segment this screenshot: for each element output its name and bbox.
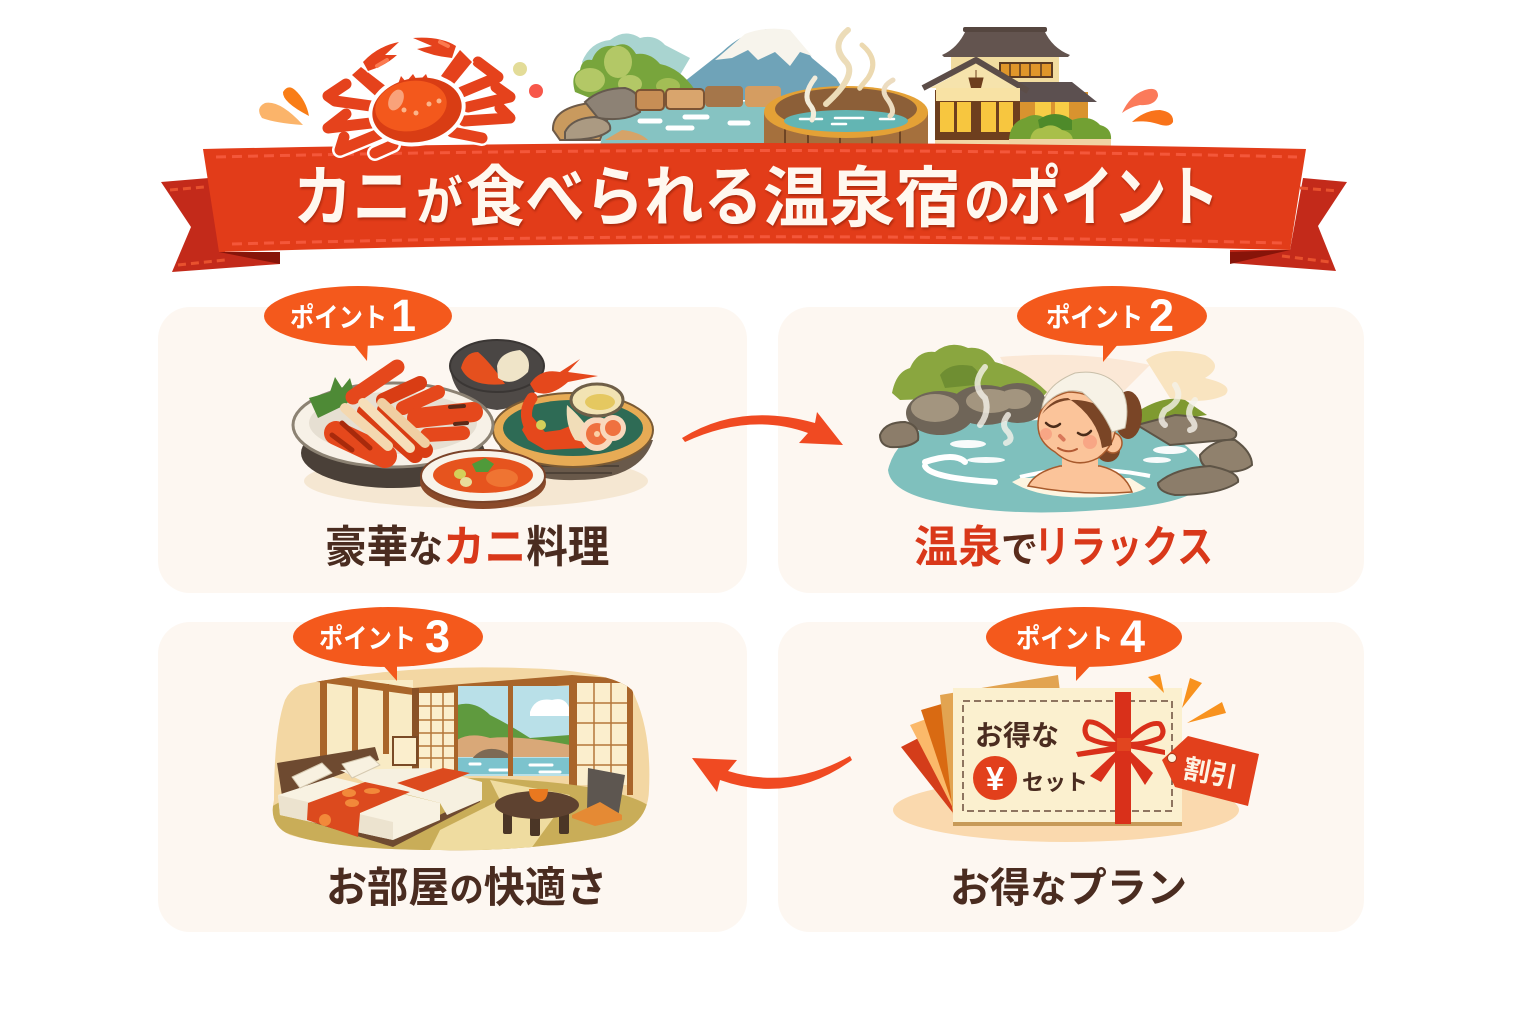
caption: point 2: で xyxy=(1001,529,1038,570)
title: カニ xyxy=(293,161,412,235)
caption: point 2: 温泉 xyxy=(914,523,1002,572)
caption: point 4: お得なプラン xyxy=(950,865,1187,911)
badge: point 1 xyxy=(264,286,452,361)
front plate xyxy=(420,450,546,509)
decoration: right splash xyxy=(1122,89,1173,126)
illustration: red crab xyxy=(328,38,510,154)
stone bowl xyxy=(450,340,544,410)
badge: point 4: ポイント xyxy=(1016,624,1113,654)
title: 温泉宿 xyxy=(763,161,961,235)
illustration: discount voucher xyxy=(893,674,1259,842)
badge: point 3 xyxy=(293,607,483,681)
yen circle xyxy=(973,756,1017,800)
title: が xyxy=(416,174,463,232)
title: の xyxy=(964,174,1011,232)
banner ribbon tails xyxy=(161,178,1347,272)
illustration: woman in hot spring xyxy=(880,345,1252,512)
panel: point 3 xyxy=(158,622,747,932)
title xyxy=(293,160,1219,235)
illustration: bushes by inn xyxy=(1009,114,1111,147)
badge: point 3: 3 xyxy=(425,611,450,662)
caption: point 3: お部屋の快適さ xyxy=(326,864,607,911)
arrow: point 4 to point 3 xyxy=(692,756,852,792)
caption: point 2: リラックス xyxy=(1034,523,1213,572)
banner xyxy=(203,143,1306,252)
voucher set text: セット xyxy=(1022,770,1088,795)
illustration: ryokan inn xyxy=(923,27,1097,148)
panel: point 1 xyxy=(158,307,747,593)
right bowl xyxy=(493,359,653,480)
arrow: point 1 to point 2 xyxy=(682,412,843,445)
illustration: mountain and outdoor bath xyxy=(553,29,850,145)
badge: point 2: 2 xyxy=(1149,290,1174,341)
illustration: Japanese room xyxy=(266,660,658,855)
yen circle: ¥ xyxy=(986,760,1005,797)
panel: point 2 xyxy=(778,307,1364,593)
ribbon bow xyxy=(1076,722,1165,785)
badge: point 2: ポイント xyxy=(1046,303,1143,333)
decoration: left splash xyxy=(259,87,309,125)
badge: point 4: 4 xyxy=(1120,611,1145,662)
tag text: 割引 xyxy=(1181,753,1240,793)
title: ポイント xyxy=(1008,160,1219,234)
illustration: crab feast xyxy=(293,340,653,509)
badge: point 3: ポイント xyxy=(319,624,416,654)
badge: point 2 xyxy=(1017,286,1207,362)
badge: point 4 xyxy=(986,607,1182,681)
panel: point 4 xyxy=(778,622,1364,932)
crab plate xyxy=(293,367,493,488)
caption: point 1: 豪華なカニ料理 xyxy=(325,523,609,572)
badge: point 1: ポイント xyxy=(290,303,387,333)
badge: point 1: 1 xyxy=(391,290,416,341)
illustration: wooden tub with steam xyxy=(764,30,928,146)
voucher text: お得な xyxy=(975,720,1059,751)
decoration: dots xyxy=(513,62,543,98)
title: 食べられる xyxy=(466,161,763,235)
caption: point 2 xyxy=(914,523,1213,572)
